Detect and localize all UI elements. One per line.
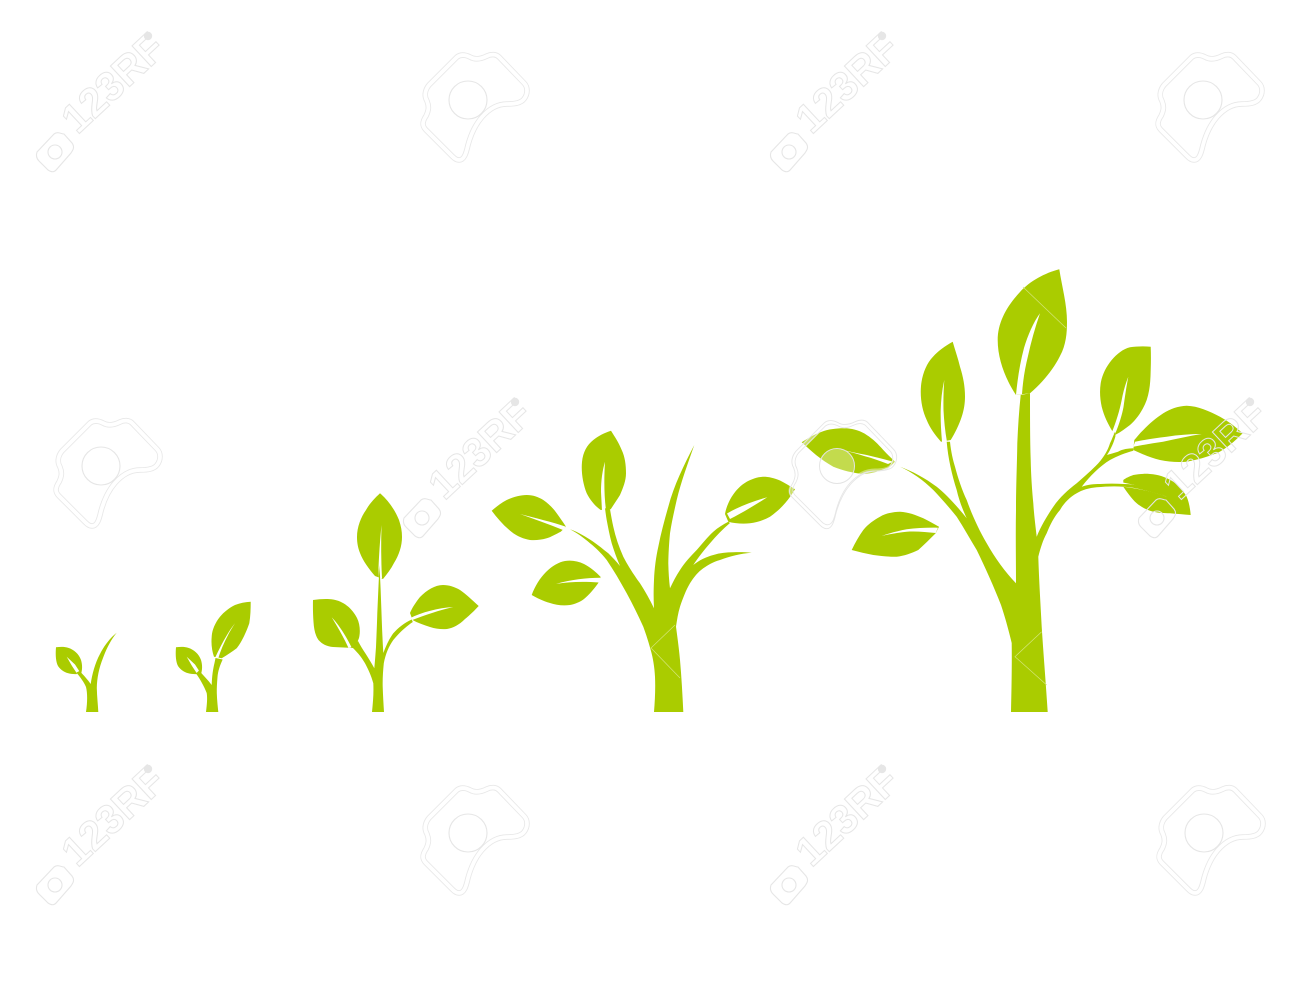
watermark: camera middle left: [56, 421, 160, 526]
plant stage 1: seedling: [56, 633, 117, 712]
watermark: 123RF bottom right: 123RF: [786, 757, 908, 875]
watermark: 123RF top left: 123RF: [52, 24, 174, 142]
watermark: camera top centre: [423, 55, 527, 160]
watermark: 123RF middle left: 123RF: [419, 390, 541, 508]
watermark: 123RF overlapping mature plant leaf: 123RF: [1154, 390, 1276, 508]
watermark: camera overlapping mature plant leaf: [790, 420, 897, 529]
watermark: 123RF bottom left: 123RF: [52, 757, 174, 875]
plant stage 5: mature plant with six leaves: [802, 269, 1243, 712]
watermark: 123RF top right: 123RF: [786, 24, 908, 142]
plant stage 3: three leaves: [313, 493, 479, 712]
plant stage 2: two leaves: [176, 602, 251, 712]
watermark: camera top right: [1158, 55, 1262, 160]
watermark: camera bottom centre: [423, 788, 527, 893]
plant stage 4: four leaves with bud: [492, 431, 795, 712]
watermark: camera bottom right: [1159, 788, 1263, 893]
